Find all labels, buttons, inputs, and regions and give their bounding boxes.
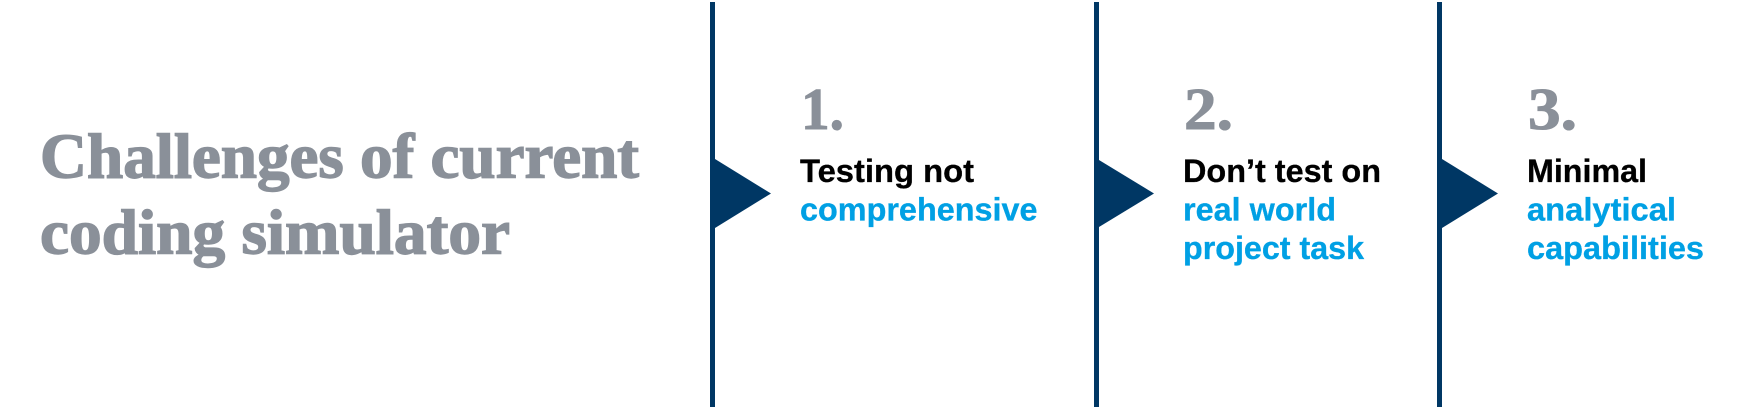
text: minimal analytical capabilities xyxy=(1527,153,1704,266)
divider arrow 3 xyxy=(1437,2,1498,407)
text: minimal analytical capabilities: capabilities xyxy=(1527,230,1704,266)
panel: challenge 1 xyxy=(800,76,1038,228)
panel: challenge 2 xyxy=(1183,76,1381,266)
text: minimal analytical capabilities: analytical xyxy=(1527,192,1676,228)
text: minimal analytical capabilities: Minimal xyxy=(1527,153,1647,189)
divider arrow 1 xyxy=(710,2,771,407)
number 1: 1. xyxy=(801,76,844,142)
title: coding simulator xyxy=(40,198,510,268)
title: Challenges of current xyxy=(40,122,639,192)
panel: challenge 3 xyxy=(1527,76,1704,266)
text: don't test on real world project task: real world xyxy=(1183,192,1336,228)
divider arrow 2 xyxy=(1094,2,1154,407)
title xyxy=(40,122,639,268)
text: don't test on real world project task: project task xyxy=(1183,230,1364,266)
text: testing not comprehensive xyxy=(800,153,1038,228)
text: testing not comprehensive: Testing not xyxy=(800,153,974,189)
text: don't test on real world project task xyxy=(1183,153,1381,266)
number 2: 2. xyxy=(1184,76,1233,142)
text: testing not comprehensive: comprehensive xyxy=(800,192,1038,228)
text: don't test on real world project task: Don’t test on xyxy=(1183,153,1381,189)
number 3: 3. xyxy=(1528,76,1577,142)
